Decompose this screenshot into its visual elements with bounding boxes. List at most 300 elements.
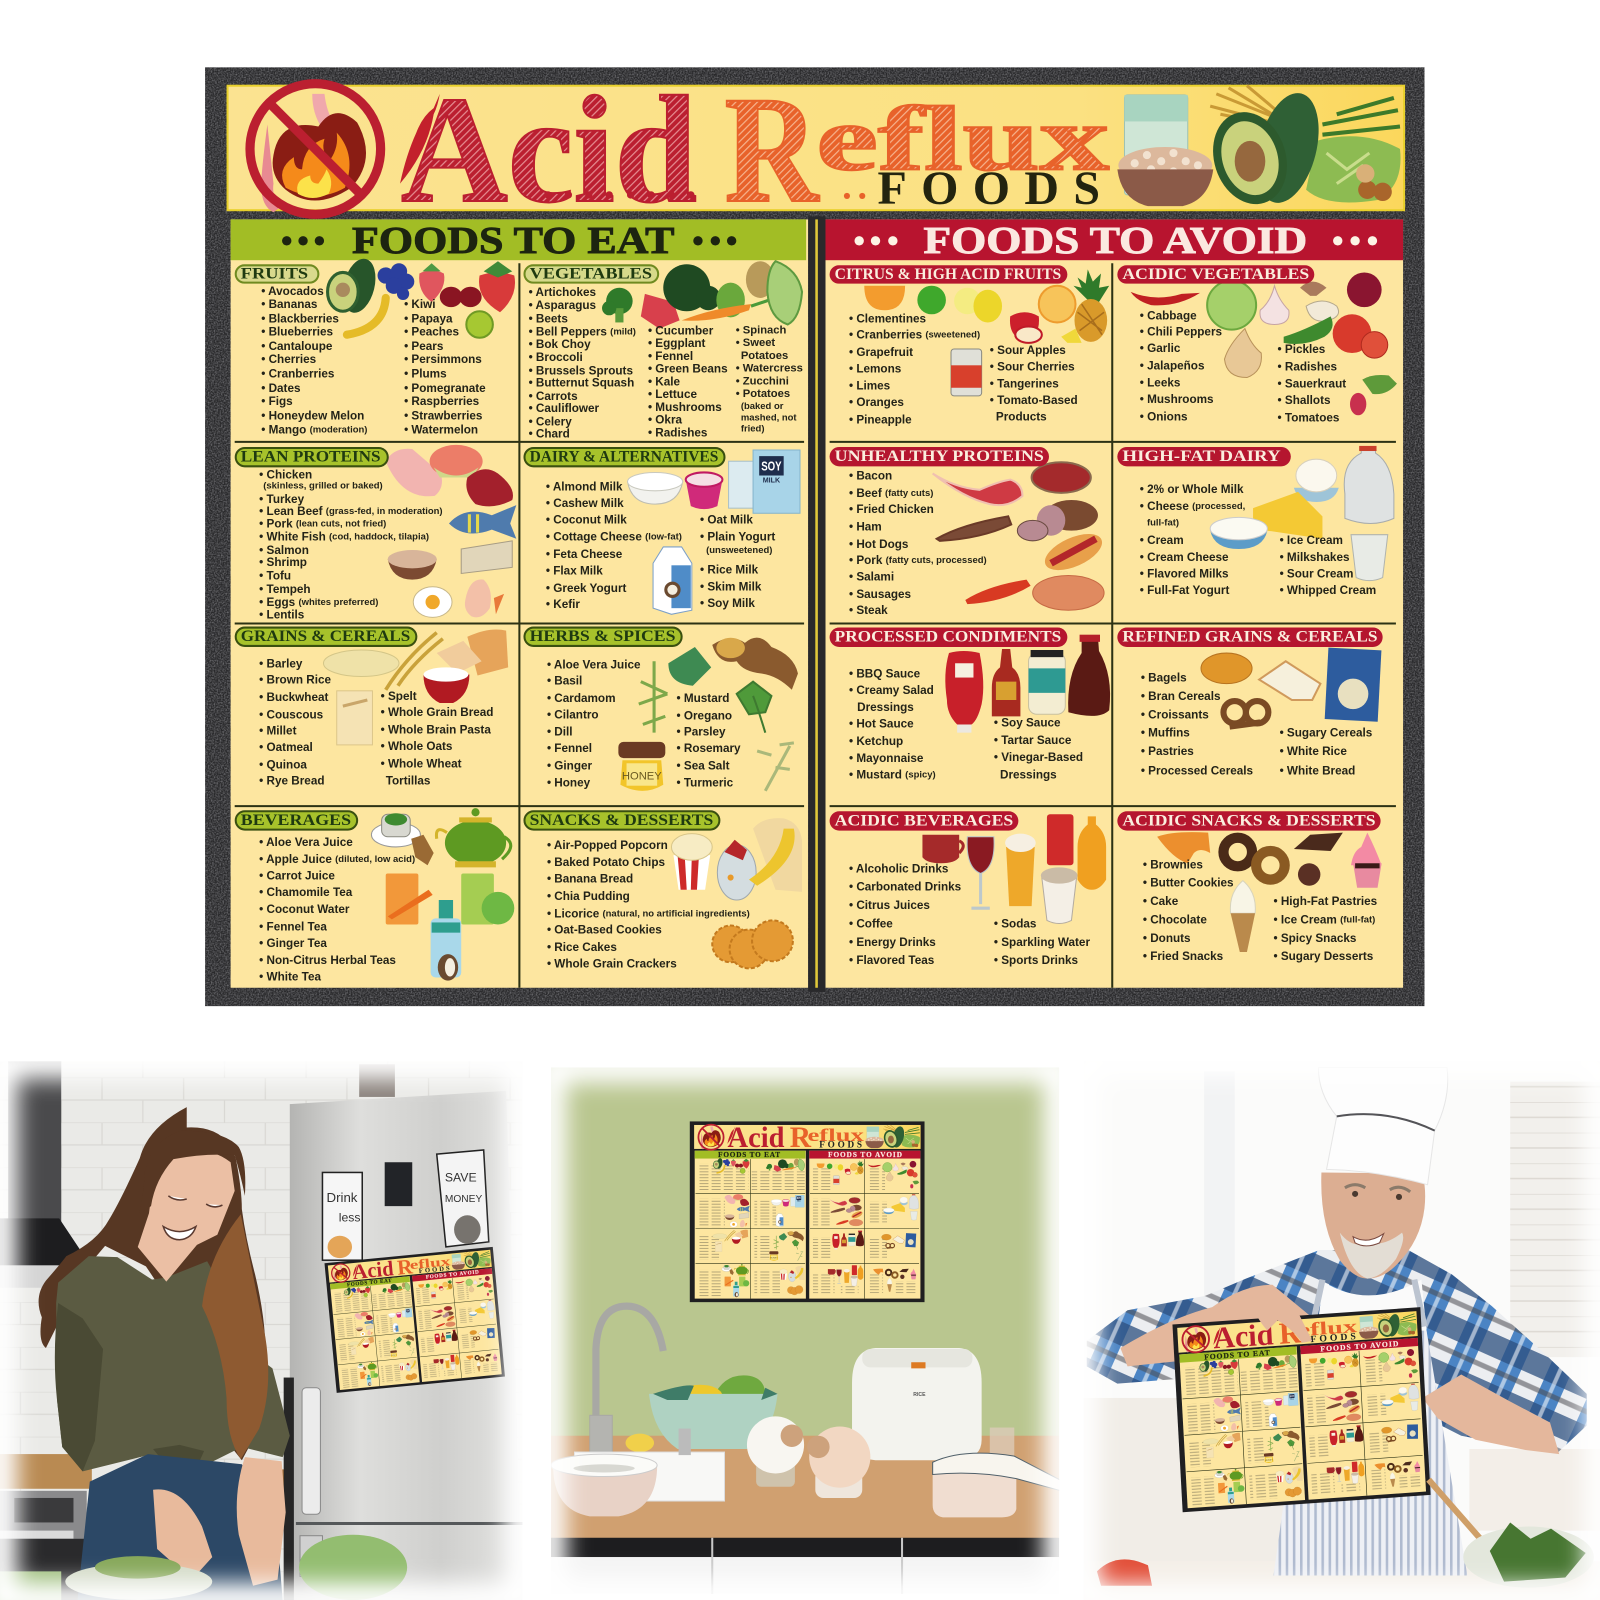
panel: foods to avoid bbox=[826, 219, 1403, 988]
woman wavy hair over shirt bbox=[202, 1214, 268, 1459]
heading: processed condiments: PROCESSED CONDIMENTS bbox=[835, 629, 1061, 646]
icons: beverages bbox=[371, 808, 514, 981]
list: dairy column one: • Flax Milk bbox=[546, 564, 603, 577]
list: acidic snacks column one: • Butter Cookies bbox=[1143, 876, 1234, 889]
list: fruits column two: • Persimmons bbox=[404, 353, 482, 366]
heading: snacks and desserts: SNACKS & DESSERTS bbox=[530, 812, 713, 829]
heading: foods to eat bbox=[231, 219, 806, 262]
list: vegetables column one: • Asparagus bbox=[529, 299, 597, 312]
icon: no-stomach-fire sign bbox=[250, 84, 440, 214]
magnet: save money: SAVE bbox=[445, 1171, 477, 1185]
list: grains column one: • Oatmeal bbox=[259, 740, 313, 753]
list: vegetables column one: • Celery bbox=[529, 415, 572, 428]
list: grains column one: • Barley bbox=[259, 657, 303, 670]
list: grains column one: • Rye Bread bbox=[259, 774, 325, 787]
range hood bbox=[0, 1061, 88, 1288]
list: fruits column one: • Blackberries bbox=[261, 312, 339, 325]
list: high-fat dairy column two: • Milkshakes bbox=[1280, 551, 1350, 564]
title: Reflux: R bbox=[724, 66, 820, 235]
mini poster in hands: Acid bbox=[1212, 1317, 1274, 1355]
cell: acidic beverages bbox=[830, 811, 1106, 967]
list: lean proteins: • Chicken bbox=[259, 468, 312, 481]
woman sleeve shadow and knot bbox=[55, 1303, 204, 1482]
list: fruits column two: • Pears bbox=[404, 339, 444, 352]
mini poster on fridge: FOODS bbox=[419, 1265, 450, 1275]
list: condiments column one: • Mayonnaise bbox=[849, 752, 924, 765]
list: lean proteins: • White Fish (cod, haddock, tilapia) bbox=[259, 530, 429, 543]
list: fruits column two: • Kiwi bbox=[404, 298, 436, 311]
photo fade: middle bbox=[551, 1067, 1059, 1594]
list: refined grains column one: • Muffins bbox=[1141, 726, 1190, 739]
wall mini poster: FOODS bbox=[819, 1140, 862, 1150]
list: refined grains column two: • White Bread bbox=[1280, 764, 1355, 777]
list: snacks: • Air-Popped Popcorn bbox=[547, 838, 668, 851]
list: herbs column one: • Cilantro bbox=[547, 708, 599, 721]
icons: lean proteins bbox=[386, 445, 516, 617]
list: unhealthy proteins: • Fried Chicken bbox=[849, 503, 934, 516]
list: lean proteins: • Tempeh bbox=[259, 582, 311, 595]
icon: glass, bowl, avocado and lettuce bbox=[1117, 86, 1401, 214]
sink and colander bbox=[551, 1429, 724, 1516]
list: acidic vegetables column one: • Mushrooms bbox=[1140, 392, 1214, 405]
cell: acidic snacks and desserts bbox=[1117, 811, 1382, 963]
cell: processed condiments bbox=[830, 628, 1110, 781]
list: snacks: • Oat-Based Cookies bbox=[547, 923, 662, 936]
mini poster in hands: FOODS bbox=[1310, 1331, 1356, 1345]
magnet: drink less: less bbox=[339, 1210, 361, 1224]
woman bbox=[39, 1107, 290, 1600]
list: herbs column two: • Parsley bbox=[677, 725, 726, 738]
list: fruits column two: • Watermelon bbox=[404, 423, 478, 436]
list: beverages: • Aloe Vera Juice bbox=[259, 835, 353, 848]
list: vegetables column two: • Mushrooms bbox=[648, 401, 722, 414]
list: condiments column one: • Mustard (spicy) bbox=[849, 768, 936, 781]
list: refined grains column one: • Croissants bbox=[1141, 708, 1209, 721]
icons: unhealthy proteins bbox=[933, 462, 1107, 610]
list: fruits column two: • Raspberries bbox=[404, 395, 480, 408]
countertop bbox=[551, 1436, 1059, 1599]
heading: foods to eat: FOODS TO EAT bbox=[352, 220, 674, 262]
list: snacks: • Chia Pudding bbox=[547, 889, 630, 902]
heading: fruits: FRUITS bbox=[241, 265, 308, 282]
list: acidic beverages column two: • Sparkling Water bbox=[994, 935, 1090, 948]
list: grains column one: • Brown Rice bbox=[259, 673, 331, 686]
title dots under Acid bbox=[544, 191, 694, 199]
list: condiments column one: • Ketchup bbox=[849, 734, 903, 747]
list: grains column two: • Whole Brain Pasta bbox=[381, 723, 491, 736]
list: vegetables column two: • Eggplant bbox=[648, 336, 706, 349]
title banner bbox=[228, 66, 1404, 235]
list: citrus column one: • Clementines bbox=[849, 312, 927, 325]
list: beverages: • White Tea bbox=[259, 970, 321, 983]
window and brick background bbox=[1084, 1071, 1600, 1600]
list: herbs column one: • Cardamom bbox=[547, 691, 616, 704]
list: acidic vegetables column two: • Shallots bbox=[1278, 394, 1331, 407]
list: unhealthy proteins: • Pork (fatty cuts, processed) bbox=[849, 554, 987, 567]
heading: herbs and spices: HERBS & SPICES bbox=[530, 628, 676, 645]
title: Reflux bbox=[724, 66, 1109, 235]
list: high-fat dairy column one: full-fat) bbox=[1147, 517, 1179, 528]
photo: kitchen counter with wall poster bbox=[551, 1067, 1065, 1599]
list: acidic snacks column two: • High-Fat Pastries bbox=[1273, 895, 1378, 908]
list: dairy column two: • Soy Milk bbox=[700, 597, 755, 610]
list: acidic beverages column one: • Alcoholic Drinks bbox=[849, 862, 949, 875]
list: vegetables column two: • Okra bbox=[648, 413, 683, 426]
list: lean proteins: • Eggs (whites preferred) bbox=[259, 596, 378, 609]
list: vegetables column three: • Watercress bbox=[736, 362, 803, 374]
list: fruits column one: • Mango (moderation) bbox=[261, 423, 367, 436]
list: vegetables column three: fried) bbox=[741, 423, 764, 434]
list: fruits column one: • Cranberries bbox=[261, 367, 335, 380]
salad bowl and lettuce bbox=[0, 1535, 407, 1600]
list: dairy column one: • Coconut Milk bbox=[546, 513, 627, 526]
list: fruits column two: • Strawberries bbox=[404, 409, 483, 422]
divider between panels bbox=[808, 216, 826, 992]
list: lean proteins: • Lean Beef (grass-fed, in moderation) bbox=[259, 505, 443, 518]
list: grains column two: • Whole Grain Bread bbox=[381, 706, 493, 719]
heading: unhealthy proteins: UNHEALTHY PROTEINS bbox=[835, 448, 1044, 465]
cell: acidic vegetables bbox=[1117, 265, 1397, 424]
list: acidic beverages column one: • Citrus Juices bbox=[849, 899, 930, 912]
woman shirt bbox=[56, 1256, 290, 1482]
list: herbs column one: • Fennel bbox=[547, 741, 592, 754]
list: refined grains column two: • White Rice bbox=[1280, 745, 1347, 758]
list: acidic snacks column two: • Ice Cream (full-fat) bbox=[1273, 913, 1375, 926]
list: herbs column two: • Sea Salt bbox=[677, 759, 730, 772]
list: high-fat dairy column two: • Ice Cream bbox=[1280, 533, 1343, 546]
list: dairy column two: (unsweetened) bbox=[706, 544, 772, 555]
heading: acidic snacks: ACIDIC SNACKS & DESSERTS bbox=[1122, 812, 1376, 829]
mini poster on fridge bbox=[324, 1246, 505, 1393]
heading: high-fat dairy: HIGH-FAT DAIRY bbox=[1122, 448, 1281, 465]
list: fruits column two: • Peaches bbox=[404, 325, 459, 338]
list: acidic vegetables column two: • Sauerkraut bbox=[1278, 377, 1346, 390]
list: grains column two: • Whole Wheat bbox=[381, 757, 462, 770]
icons: dairy bbox=[628, 450, 800, 614]
cell: beverages bbox=[236, 808, 514, 983]
rice cooker: RICE bbox=[913, 1392, 926, 1398]
cell: dairy and alternatives bbox=[524, 448, 800, 614]
list: beverages: • Coconut Water bbox=[259, 903, 350, 916]
list: citrus column one: • Cranberries (sweetened) bbox=[849, 328, 980, 341]
chef hat bbox=[1318, 1067, 1448, 1185]
list: acidic snacks column two: • Spicy Snacks bbox=[1273, 931, 1357, 944]
list: lean proteins: • Salmon bbox=[259, 544, 309, 557]
list: snacks: • Rice Cakes bbox=[547, 940, 617, 953]
list: lean proteins: (skinless, grilled or baked) bbox=[263, 480, 383, 491]
title: Foods: FOODS bbox=[878, 162, 1100, 215]
list: beverages: • Chamomile Tea bbox=[259, 885, 353, 898]
list: refined grains column one: • Bagels bbox=[1141, 671, 1187, 684]
list: dairy column one: • Almond Milk bbox=[546, 480, 623, 493]
list: high-fat dairy column two: • Whipped Cream bbox=[1280, 583, 1376, 596]
cell: grains and cereals bbox=[236, 628, 508, 787]
list: fruits column one: • Bananas bbox=[261, 298, 318, 311]
list: acidic vegetables column one: • Jalapeños bbox=[1140, 359, 1205, 372]
list: vegetables column one: • Beets bbox=[529, 312, 568, 325]
list: dairy column two: • Skim Milk bbox=[700, 580, 762, 593]
list: unhealthy proteins: • Sausages bbox=[849, 587, 912, 600]
icons: condiments bbox=[945, 635, 1110, 733]
list: herbs column two: • Mustard bbox=[677, 691, 729, 704]
list: lean proteins: • Lentils bbox=[259, 608, 305, 621]
list: beverages: • Ginger Tea bbox=[259, 936, 327, 949]
icons: high-fat dairy bbox=[1210, 446, 1394, 581]
mint bowl with greens bbox=[649, 1375, 778, 1449]
mini poster in hands bbox=[1172, 1306, 1431, 1512]
list: vegetables column one: • Butternut Squash bbox=[529, 376, 634, 389]
fridge bbox=[284, 1064, 522, 1600]
woman jeans bbox=[78, 1454, 283, 1600]
list: citrus column two: • Tangerines bbox=[990, 377, 1059, 390]
mini poster in hands: eflux bbox=[1297, 1316, 1359, 1341]
list: condiments column one: • Creamy Salad bbox=[849, 683, 934, 696]
grater box bbox=[933, 1428, 1065, 1517]
list: vegetables column one: • Brussels Sprouts bbox=[529, 364, 633, 377]
list: beverages: • Apple Juice (diluted, low acid) bbox=[259, 853, 415, 866]
list: citrus column two: • Tomato-Based bbox=[990, 394, 1078, 407]
list: high-fat dairy column one: • Flavored Milks bbox=[1140, 567, 1229, 580]
woman hands bbox=[153, 1457, 286, 1586]
list: acidic vegetables column two: • Pickles bbox=[1278, 342, 1326, 355]
list: beverages: • Carrot Juice bbox=[259, 869, 335, 882]
magnet: keypad bbox=[385, 1162, 412, 1206]
list: acidic snacks column one: • Brownies bbox=[1143, 858, 1203, 871]
list: condiments column two: • Soy Sauce bbox=[994, 716, 1061, 729]
title: Reflux: eflux bbox=[816, 87, 1109, 189]
list: citrus column two: Products bbox=[996, 410, 1047, 423]
list: herbs column one: • Dill bbox=[547, 725, 573, 738]
wall mini poster bbox=[690, 1121, 925, 1302]
list: citrus column one: • Pineapple bbox=[849, 413, 912, 426]
list: beverages: • Fennel Tea bbox=[259, 920, 327, 933]
list: grains column one: • Buckwheat bbox=[259, 690, 329, 703]
list: grains column two: Tortillas bbox=[386, 774, 431, 787]
list: unhealthy proteins: • Hot Dogs bbox=[849, 537, 909, 550]
icons: snacks bbox=[671, 818, 802, 968]
heading: fruits bbox=[236, 265, 318, 283]
list: unhealthy proteins: • Salami bbox=[849, 570, 894, 583]
list: dairy column two: • Oat Milk bbox=[700, 513, 753, 526]
list: high-fat dairy column one: • Cheese (processed, bbox=[1140, 500, 1245, 513]
list: vegetables column three: Potatoes bbox=[741, 350, 788, 362]
list: vegetables column two: • Green Beans bbox=[648, 362, 728, 375]
list: acidic snacks column one: • Fried Snacks bbox=[1143, 950, 1224, 963]
icons: acidic beverages bbox=[922, 814, 1106, 923]
list: fruits column two: • Papaya bbox=[404, 312, 453, 325]
list: acidic vegetables column one: • Garlic bbox=[1140, 341, 1181, 354]
wall mini poster: FOODS TO EAT bbox=[718, 1151, 780, 1159]
list: vegetables column one: • Chard bbox=[529, 427, 570, 440]
list: citrus column two: • Sour Cherries bbox=[990, 360, 1075, 373]
list: condiments column two: Dressings bbox=[1000, 768, 1057, 781]
wall mini poster: R bbox=[790, 1122, 812, 1154]
magnet: drink less bbox=[322, 1172, 362, 1260]
list: vegetables column two: • Fennel bbox=[648, 350, 693, 363]
chef face bbox=[1321, 1172, 1425, 1279]
mini poster in hands: R bbox=[1278, 1315, 1303, 1351]
list: vegetables column three: (baked or bbox=[741, 401, 784, 412]
list: snacks: • Whole Grain Crackers bbox=[547, 957, 677, 970]
icons: refined grains bbox=[1201, 648, 1381, 727]
list: acidic beverages column two: • Sports Drinks bbox=[994, 954, 1079, 967]
list: dairy column one: • Cottage Cheese (low-fat) bbox=[546, 530, 682, 543]
list: condiments column two: • Vinegar-Based bbox=[994, 751, 1083, 764]
heading: dairy and alternatives: DAIRY & ALTERNATIVES bbox=[530, 449, 718, 466]
chef shirt and apron bbox=[1087, 1250, 1587, 1576]
photo fade: left bbox=[0, 1061, 522, 1600]
wall mini poster: Acid bbox=[728, 1122, 785, 1154]
list: acidic snacks column one: • Donuts bbox=[1143, 931, 1191, 944]
list: acidic vegetables column one: • Chili Peppers bbox=[1140, 325, 1223, 338]
list: vegetables column three: mashed, not bbox=[741, 412, 797, 423]
icons: acidic snacks bbox=[1157, 832, 1382, 952]
list: unhealthy proteins: • Steak bbox=[849, 604, 888, 617]
mini poster on fridge: eflux bbox=[409, 1254, 452, 1272]
heading: refined grains: REFINED GRAINS & CEREALS bbox=[1122, 629, 1378, 646]
heading: acidic vegetables: ACIDIC VEGETABLES bbox=[1122, 266, 1309, 283]
icons: dairy: SOY bbox=[761, 458, 782, 473]
cell: unhealthy proteins bbox=[830, 447, 1107, 617]
list: condiments column one: • Hot Sauce bbox=[849, 717, 914, 730]
list: high-fat dairy column two: • Sour Cream bbox=[1280, 567, 1353, 580]
list: acidic vegetables column one: • Leeks bbox=[1140, 376, 1181, 389]
list: citrus column two: • Sour Apples bbox=[990, 344, 1066, 357]
list: grains column one: • Quinoa bbox=[259, 758, 307, 771]
list: herbs column two: • Oregano bbox=[677, 709, 732, 722]
list: dairy column one: • Feta Cheese bbox=[546, 548, 623, 561]
list: dairy column two: • Rice Milk bbox=[700, 563, 759, 576]
wall mini poster: FOODS TO AVOID bbox=[828, 1151, 902, 1159]
rice cooker bbox=[852, 1348, 982, 1460]
list: refined grains column one: • Processed Cereals bbox=[1141, 764, 1254, 777]
list: vegetables column two: • Lettuce bbox=[648, 387, 697, 400]
list: vegetables column three: • Potatoes bbox=[736, 388, 790, 400]
list: grains column one: • Millet bbox=[259, 724, 297, 737]
list: citrus column one: • Grapefruit bbox=[849, 346, 913, 359]
list: herbs column two: • Turmeric bbox=[677, 776, 734, 789]
list: high-fat dairy column one: • Cream bbox=[1140, 533, 1184, 546]
icons: fruits bbox=[328, 255, 515, 338]
list: fruits column one: • Honeydew Melon bbox=[261, 409, 364, 422]
heading: lean proteins: LEAN PROTEINS bbox=[241, 449, 381, 466]
list: acidic vegetables column one: • Onions bbox=[1140, 410, 1188, 423]
list: vegetables column one: • Cauliflower bbox=[529, 402, 600, 415]
woman hair front bbox=[150, 1136, 246, 1207]
woman back hair bbox=[39, 1107, 266, 1460]
list: snacks: • Baked Potato Chips bbox=[547, 856, 665, 869]
list: grains column one: • Couscous bbox=[259, 708, 324, 721]
list: dairy column one: • Kefir bbox=[546, 598, 580, 611]
mini poster on fridge: R bbox=[396, 1254, 414, 1280]
list: fruits column one: • Avocados bbox=[261, 284, 324, 297]
list: vegetables column three: • Zucchini bbox=[736, 376, 789, 388]
list: vegetables column one: • Carrots bbox=[529, 389, 578, 402]
list: condiments column one: • BBQ Sauce bbox=[849, 667, 921, 680]
chef hands and arm bbox=[1120, 1285, 1559, 1454]
list: high-fat dairy column one: • 2% or Whole Milk bbox=[1140, 482, 1244, 495]
list: refined grains column two: • Sugary Cereals bbox=[1280, 726, 1373, 739]
list: dairy column one: • Greek Yogurt bbox=[546, 581, 627, 594]
mini poster on fridge: Acid bbox=[351, 1256, 395, 1284]
list: dairy column two: • Plain Yogurt bbox=[700, 530, 775, 543]
list: vegetables column one: • Bok Choy bbox=[529, 337, 591, 350]
salad bowl and spoon bbox=[1097, 1480, 1594, 1588]
magnet: save money: MONEY bbox=[445, 1194, 482, 1205]
mini poster in hands: FOODS TO EAT bbox=[1204, 1348, 1270, 1362]
icons: citrus bbox=[864, 269, 1109, 396]
list: herbs column one: • Basil bbox=[547, 674, 582, 687]
choppers bbox=[747, 1416, 870, 1498]
list: unhealthy proteins: • Ham bbox=[849, 520, 882, 533]
woman face features bbox=[163, 1196, 222, 1240]
icons: grains bbox=[323, 629, 508, 745]
mini poster on fridge: FOODS TO AVOID bbox=[426, 1269, 479, 1281]
list: acidic snacks column two: • Sugary Desserts bbox=[1273, 950, 1374, 963]
list: herbs column two: • Rosemary bbox=[677, 741, 741, 754]
list: acidic vegetables column two: • Tomatoes bbox=[1278, 411, 1340, 424]
heading: foods to avoid: FOODS TO AVOID bbox=[923, 220, 1307, 262]
woman neck and face bbox=[138, 1149, 235, 1282]
cell: citrus and high acid fruits bbox=[830, 265, 1109, 426]
photo fade: right bbox=[1084, 1061, 1600, 1600]
cell: fruits bbox=[236, 255, 515, 436]
magnet: drink less: Drink bbox=[327, 1190, 358, 1205]
list: lean proteins: • Tofu bbox=[259, 569, 291, 582]
list: vegetables column two: • Cucumber bbox=[648, 324, 714, 337]
cell: refined grains and cereals bbox=[1117, 628, 1383, 777]
list: citrus column one: • Oranges bbox=[849, 396, 904, 409]
heading: foods to avoid bbox=[826, 219, 1403, 262]
list: acidic beverages column one: • Flavored Teas bbox=[849, 954, 935, 967]
list: refined grains column one: • Pastries bbox=[1141, 745, 1194, 758]
heading: beverages: BEVERAGES bbox=[241, 812, 351, 829]
list: vegetables column three: • Sweet bbox=[736, 337, 775, 349]
list: condiments column one: Dressings bbox=[857, 701, 914, 714]
list: acidic vegetables column two: • Radishes bbox=[1278, 360, 1337, 373]
list: grains column two: • Whole Oats bbox=[381, 739, 453, 752]
list: snacks: • Banana Bread bbox=[547, 872, 633, 885]
cell: snacks and desserts bbox=[524, 811, 802, 970]
list: unhealthy proteins: • Bacon bbox=[849, 469, 892, 482]
wall mini poster: eflux bbox=[807, 1125, 864, 1145]
list: acidic snacks column one: • Cake bbox=[1143, 895, 1179, 908]
list: herbs column one: • Aloe Vera Juice bbox=[547, 658, 641, 671]
list: unhealthy proteins: • Beef (fatty cuts) bbox=[849, 486, 933, 499]
icons: vegetables bbox=[602, 261, 802, 329]
list: acidic snacks column one: • Chocolate bbox=[1143, 913, 1207, 926]
photo: chef holding poster bbox=[1084, 1061, 1600, 1600]
lemon bbox=[626, 1434, 654, 1452]
list: vegetables column one: • Broccoli bbox=[529, 351, 583, 364]
mini poster in hands: FOODS TO AVOID bbox=[1320, 1339, 1399, 1353]
cell: high-fat dairy bbox=[1117, 446, 1394, 596]
list: dairy column one: • Cashew Milk bbox=[546, 497, 624, 510]
magnet: save money bbox=[437, 1150, 489, 1247]
cell: herbs and spices bbox=[524, 628, 798, 791]
icons: herbs: HONEY bbox=[622, 771, 662, 783]
panel: foods to eat bbox=[231, 219, 808, 988]
list: fruits column one: • Dates bbox=[261, 381, 301, 394]
list: vegetables column one: • Bell Peppers (mild) bbox=[529, 325, 636, 338]
list: citrus column one: • Limes bbox=[849, 379, 891, 392]
heading: vegetables: VEGETABLES bbox=[530, 265, 652, 282]
cell: lean proteins bbox=[236, 445, 516, 621]
photo: woman in kitchen with fridge magnet bbox=[0, 1061, 522, 1600]
list: vegetables column three: • Spinach bbox=[736, 325, 787, 337]
list: fruits column one: • Figs bbox=[261, 395, 293, 408]
heading: acidic beverages: ACIDIC BEVERAGES bbox=[835, 812, 1013, 829]
